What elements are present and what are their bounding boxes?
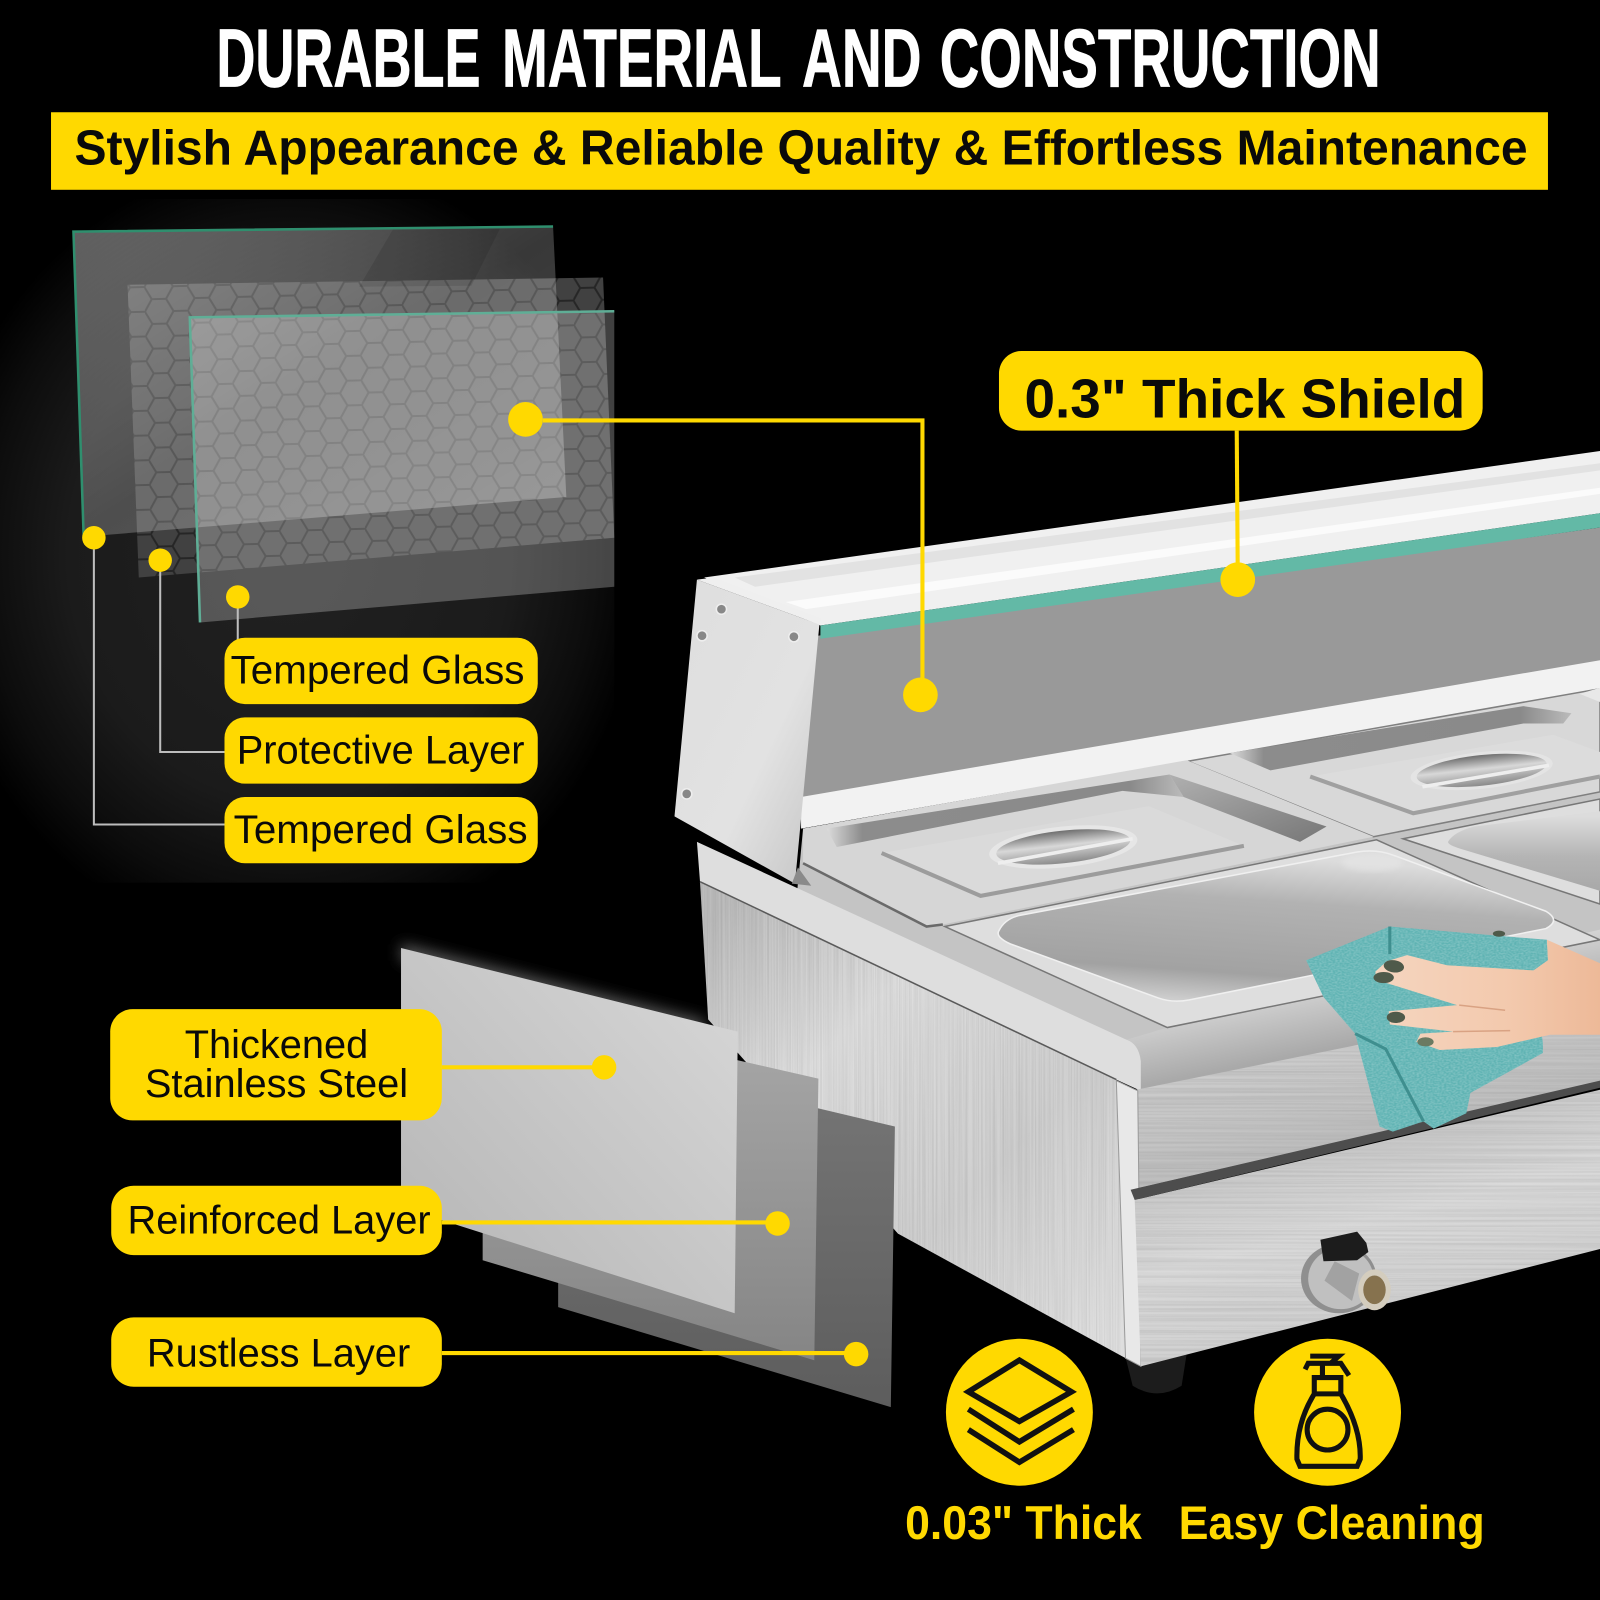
- fingernails: [1373, 931, 1505, 1046]
- glass layer dots: [82, 526, 249, 609]
- title: AND: [802, 12, 921, 105]
- label: tempered glass front: Tempered Glass: [231, 649, 524, 693]
- glass layer leader lines: [94, 538, 238, 824]
- panel: steel layer sheets: [401, 948, 895, 1407]
- top rim: [697, 842, 1141, 1091]
- label: tempered glass rear: [224, 797, 538, 863]
- drain valve: [1301, 1232, 1391, 1313]
- label: thickened stainless steel: [110, 1009, 442, 1120]
- label: 0.03 inch thick: 0.03" Thick: [905, 1497, 1143, 1549]
- front open pan: [945, 840, 1600, 1028]
- label: tempered glass rear: Tempered Glass: [234, 808, 528, 852]
- tray channel: [827, 774, 1184, 847]
- title: [216, 12, 1381, 105]
- corner post: [1116, 1081, 1141, 1366]
- stainless sheet: [401, 948, 738, 1313]
- lid handle: [987, 819, 1139, 875]
- glass shield pane: [796, 528, 1600, 799]
- shield top band: [704, 451, 1600, 626]
- title: DURABLE: [216, 12, 481, 105]
- front tempered glass: [190, 311, 614, 622]
- label: protective layer: [224, 717, 538, 784]
- callout: thick shield: [999, 351, 1483, 597]
- front left lid tray: [803, 760, 1373, 927]
- upper front panel: [1136, 996, 1600, 1189]
- right open pan: [1403, 799, 1600, 904]
- label: rustless layer: Rustless Layer: [147, 1331, 410, 1375]
- drawer seam: [1131, 1081, 1600, 1200]
- steel sheet back glow: [401, 944, 704, 1037]
- screws: [682, 604, 799, 799]
- label: reinforced layer: Reinforced Layer: [128, 1199, 431, 1243]
- shield green glass edge: [820, 513, 1600, 639]
- icon: spray bottle: [1254, 1339, 1401, 1486]
- label: thickened stainless steel: Thickened: [185, 1023, 368, 1067]
- protective honeycomb layer: [128, 278, 614, 578]
- rustless sheet: [558, 1020, 895, 1407]
- title: MATERIAL: [502, 12, 782, 105]
- back right lid tray: [1188, 688, 1600, 837]
- rear tempered glass: [73, 227, 566, 537]
- connector: reinforced layer: [442, 1211, 790, 1236]
- top deck behind pans: [797, 689, 1600, 1047]
- connector: rustless layer: [442, 1342, 868, 1366]
- connector: glass layers to shield pane: [508, 402, 938, 712]
- label: thickened stainless steel: Stainless Steel: [145, 1062, 408, 1106]
- left side panel: [700, 882, 1126, 1358]
- label: easy cleaning: Easy Cleaning: [1179, 1497, 1485, 1549]
- teal cleaning cloth: [1306, 927, 1548, 1132]
- side end plate: [674, 578, 821, 886]
- title: CONSTRUCTION: [940, 12, 1381, 105]
- lid plate: [882, 806, 1244, 896]
- label: reinforced layer: [111, 1186, 442, 1255]
- icon: stacked layers: [946, 1339, 1093, 1486]
- callout: thick shield: 0.3" Thick Shield: [1024, 367, 1465, 429]
- label: rustless layer: [111, 1317, 442, 1387]
- panel: glass shield layers: [0, 199, 614, 883]
- shield base strip: [801, 660, 1600, 829]
- rim seam line: [700, 882, 1116, 1080]
- label: tempered glass front: [224, 638, 538, 704]
- front rim: [1127, 930, 1600, 1094]
- lower drawer panel: [1135, 1090, 1600, 1366]
- connector: stainless steel: [442, 1055, 616, 1080]
- label: protective layer: Protective Layer: [237, 728, 524, 772]
- tray channel: [1230, 706, 1571, 770]
- machine: bain marie: [674, 451, 1600, 1393]
- hand: [1373, 931, 1600, 1050]
- reinforced sheet: [483, 1020, 818, 1360]
- lid plate: [1310, 735, 1600, 813]
- tray front lip: [803, 863, 943, 927]
- subtitle banner: [51, 112, 1548, 190]
- lid handle: [1409, 745, 1555, 796]
- subtitle banner: Stylish Appearance & Reliable Quality & Effortless Maintenance: [74, 121, 1528, 175]
- rear foot: [1126, 1347, 1188, 1393]
